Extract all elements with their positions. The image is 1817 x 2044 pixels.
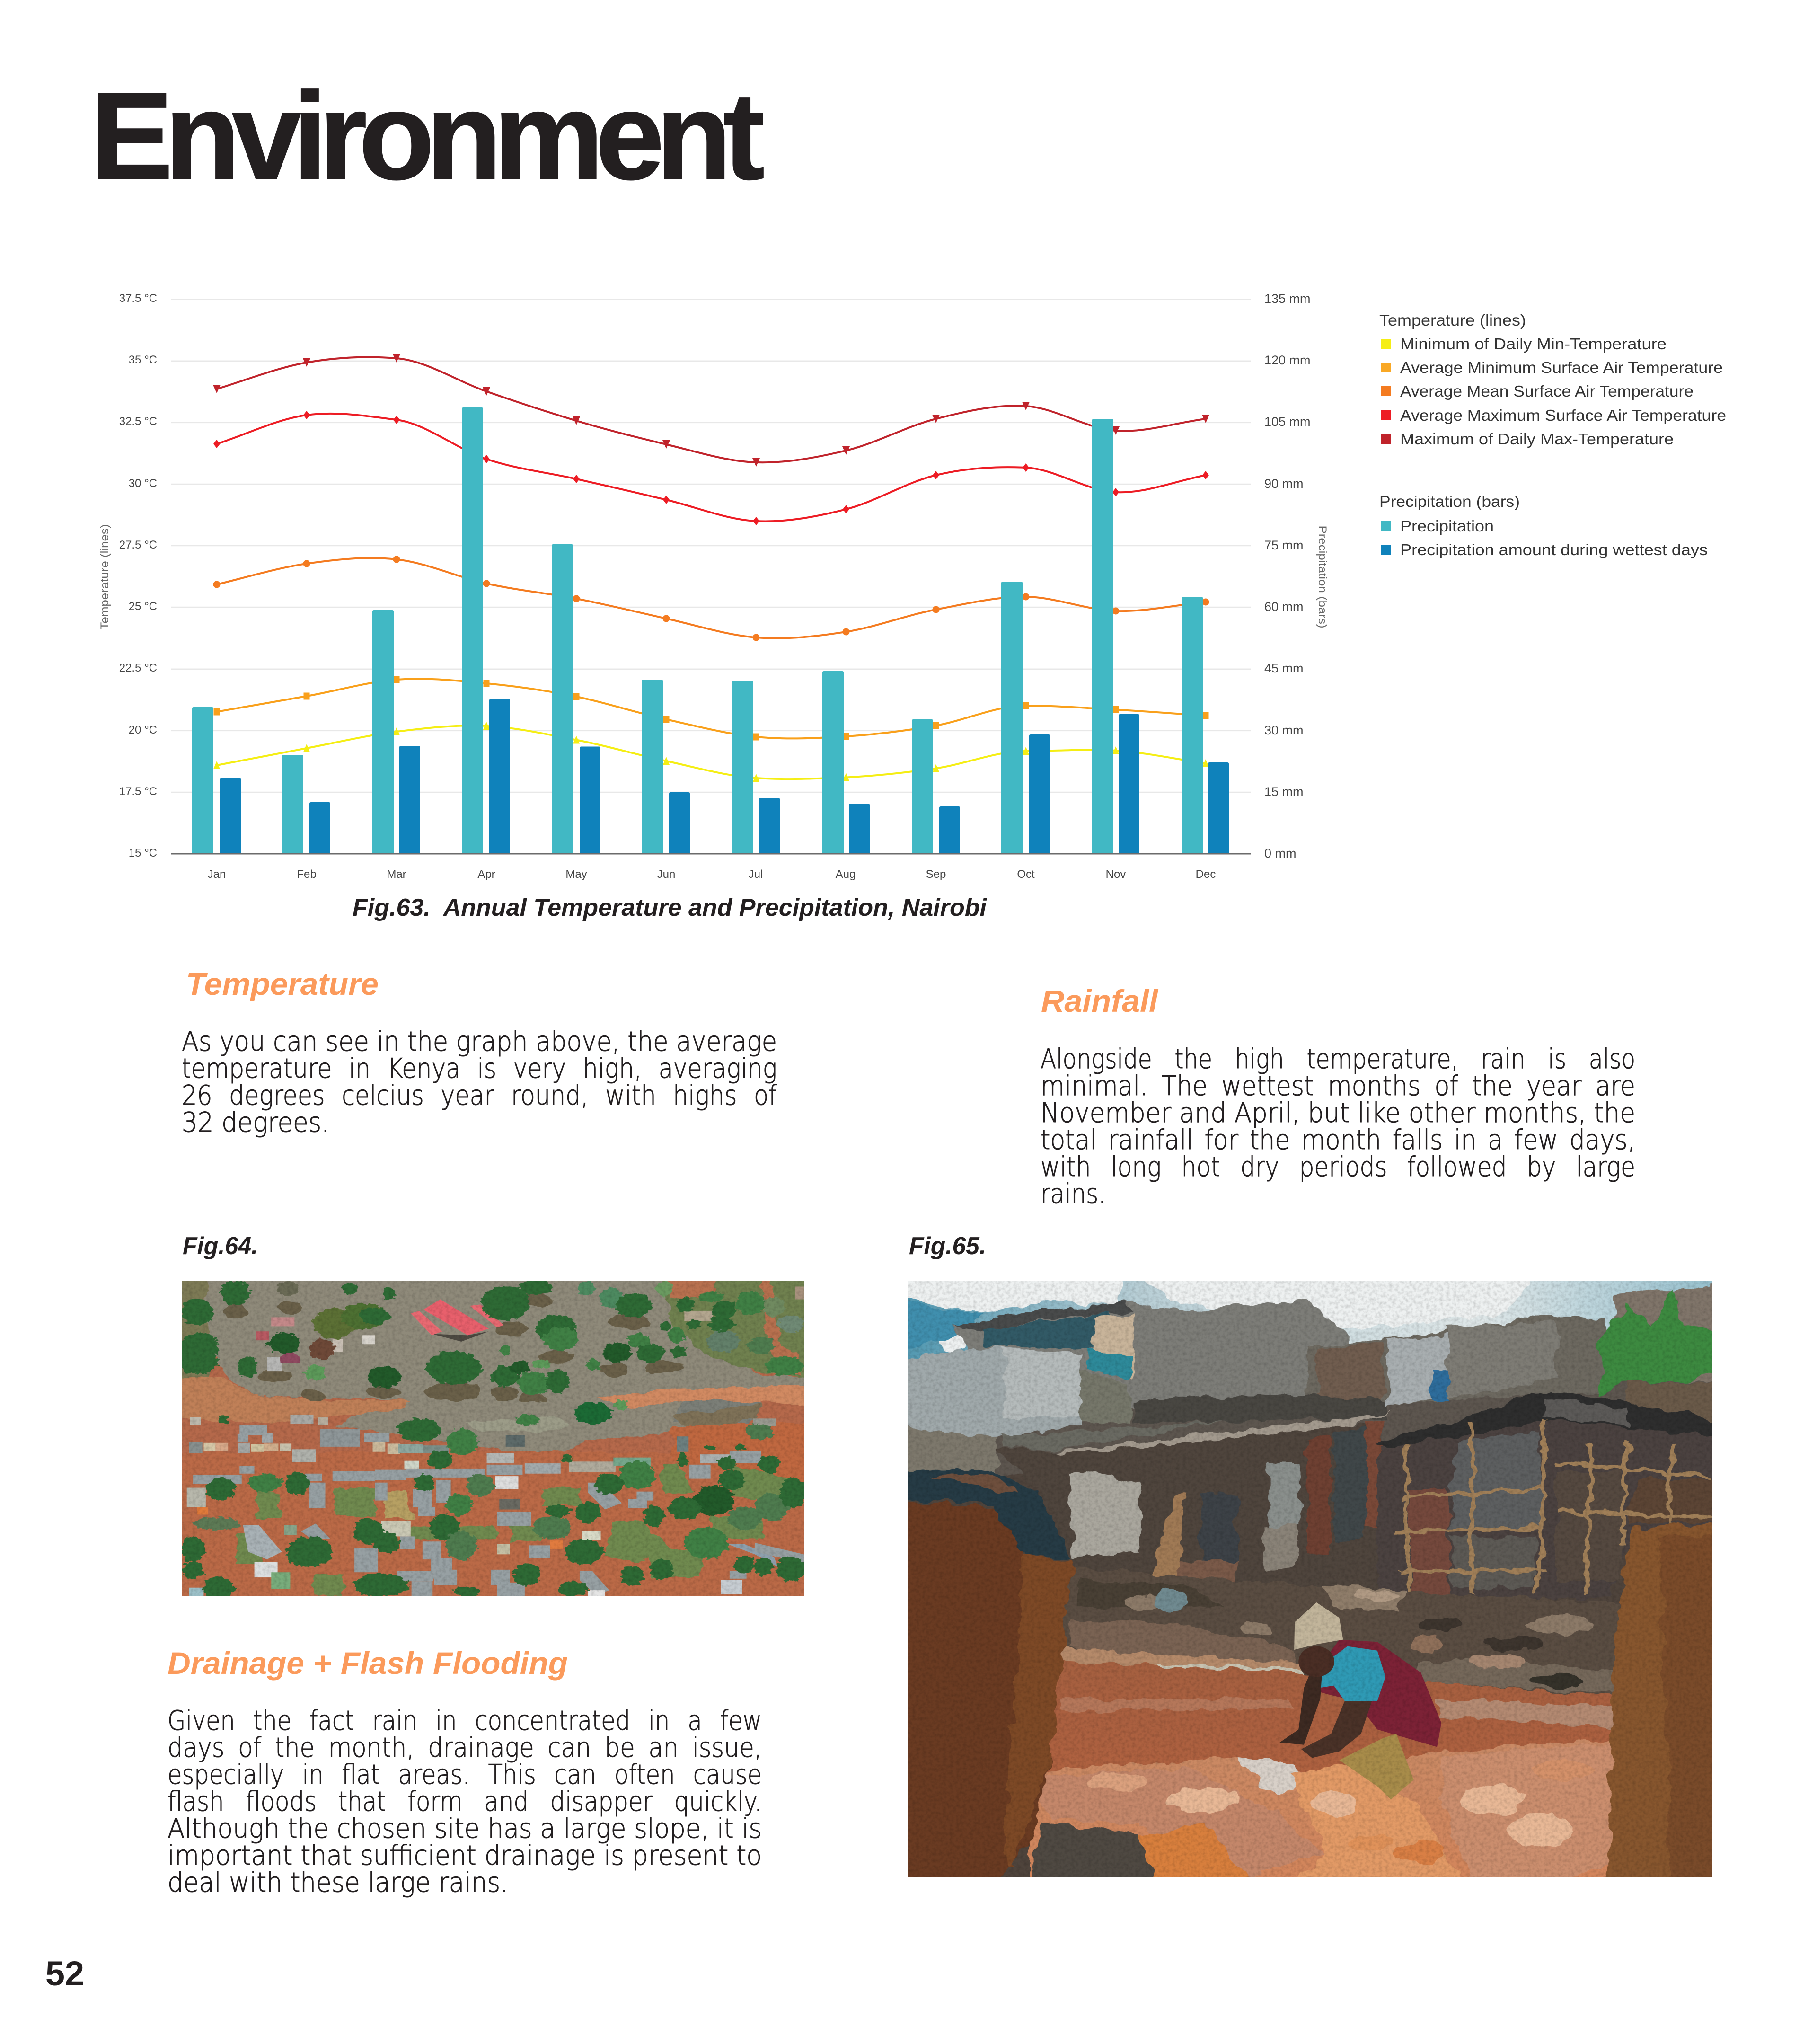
left axis labels: 15 °C [129, 847, 157, 859]
left axis labels: 22.5 °C [119, 662, 157, 674]
text block: temperature: temperature in Kenya is very high, averaging [182, 1053, 777, 1084]
month labels: Sep [926, 868, 946, 881]
text block: rainfall: rains. [1041, 1178, 1106, 1210]
month labels: Nov [1106, 868, 1126, 881]
mid shacks [1133, 1395, 1388, 1423]
text block: rainfall: Alongside the high temperature, rain is also [1041, 1044, 1635, 1075]
legend item: precipitation: Precipitation [1400, 517, 1494, 535]
text block: temperature: 32 degrees. [182, 1107, 329, 1138]
left axis labels: 20 °C [129, 724, 157, 736]
bars: precipitation amount during wettest days [220, 699, 1229, 854]
month labels: Jun [657, 868, 675, 881]
figure label: Fig.65: Fig.65. [909, 1232, 986, 1260]
text block: drainage and flash flooding [168, 1705, 762, 1898]
left axis labels: 17.5 °C [119, 785, 157, 798]
water [1041, 1662, 1627, 1782]
combo chart: annual temperature and precipitation [98, 292, 1329, 881]
legend item: maximum of daily max: Maximum of Daily Max-Temperature [1400, 430, 1674, 448]
month labels: Oct [1017, 868, 1035, 881]
heading: rainfall: Rainfall [1041, 983, 1159, 1018]
title: Environment [90, 67, 765, 205]
left axis labels [119, 292, 157, 859]
right axis labels: 75 mm [1264, 538, 1304, 552]
left axis labels: 35 °C [129, 354, 157, 366]
right axis labels: 105 mm [1264, 415, 1311, 429]
text block: temperature: 26 degrees celcius year round, with highs of [182, 1080, 777, 1111]
red tin roofs [432, 1331, 489, 1342]
legend [1379, 311, 1726, 558]
legend item: average mean: Average Mean Surface Air Temperature [1400, 382, 1694, 400]
text block: rainfall [1041, 1044, 1635, 1210]
left axis labels: 27.5 °C [119, 539, 157, 551]
right axis labels: 15 mm [1264, 785, 1304, 799]
right axis labels: 60 mm [1264, 600, 1304, 614]
text block: drainage and flash flooding: important that sufficient drainage is present to [168, 1840, 762, 1871]
y axis title: temperature: Temperature (lines) [98, 524, 111, 629]
sky [908, 1281, 1712, 1359]
y axis title: precipitation: Precipitation (bars) [1316, 526, 1329, 628]
text block: rainfall: total rainfall for the month falls in a few days, [1041, 1124, 1635, 1156]
left axis labels: 37.5 °C [119, 292, 157, 305]
figure label: Fig.64: Fig.64. [183, 1232, 258, 1260]
right axis labels: 90 mm [1264, 477, 1304, 491]
month labels: Aug [836, 868, 856, 881]
heading: temperature: Temperature [186, 966, 379, 1001]
right axis labels: 30 mm [1264, 723, 1304, 737]
chart caption: Fig.63. Annual Temperature and Precipitation, Nairobi [353, 894, 988, 921]
legend item: average maximum: Average Maximum Surface Air Temperature [1400, 407, 1726, 424]
legend heading: precipitation: Precipitation (bars) [1379, 493, 1520, 510]
month labels: Apr [477, 868, 495, 881]
right shack [1377, 1418, 1736, 1598]
rubbish bank [1057, 1567, 1627, 1701]
left axis labels: 25 °C [129, 600, 157, 613]
right wooden post [1608, 1523, 1736, 1887]
grid lines [171, 299, 1251, 792]
month labels: Mar [387, 868, 406, 881]
page number: 52 [45, 1955, 84, 1993]
heading: drainage and flash flooding: Drainage + Flash Flooding [168, 1646, 568, 1681]
month labels: May [565, 868, 587, 881]
left axis labels: 32.5 °C [119, 415, 157, 428]
line: average mean surface air temperature [213, 556, 1209, 641]
month labels: Jan [208, 868, 226, 881]
line: maximum of daily max temperature [213, 354, 1209, 467]
line: average maximum surface air temperature [213, 411, 1209, 525]
text block: drainage and flash flooding: days of the month, drainage can be an issue, [168, 1732, 762, 1763]
text block: rainfall: with long hot dry periods followed by large [1041, 1151, 1635, 1183]
text block: temperature [182, 1026, 777, 1138]
text block: drainage and flash flooding: deal with these large rains. [168, 1867, 508, 1898]
photo: aerial view of flooded village [182, 1281, 804, 1596]
x axis baseline [171, 853, 1251, 855]
banana plant [1596, 1290, 1712, 1397]
legend item: average minimum: Average Minimum Surface Air Temperature [1400, 359, 1723, 376]
text block: drainage and flash flooding: especially in flat areas. This can often cause [168, 1759, 762, 1790]
left axis labels: 30 °C [129, 477, 157, 490]
month labels: Feb [297, 868, 317, 881]
back buildings [953, 1300, 1348, 1410]
right axis labels: 135 mm [1264, 292, 1311, 306]
text block: rainfall: minimal. The wettest months of the year are [1041, 1071, 1635, 1102]
right axis labels: 0 mm [1264, 846, 1297, 860]
line: minimum of daily min temperature [213, 722, 1209, 782]
text block: temperature: As you can see in the graph above, the average [182, 1026, 777, 1057]
right axis labels: 45 mm [1264, 661, 1304, 675]
right axis labels: 120 mm [1264, 353, 1311, 367]
left wooden post [889, 1500, 1073, 1887]
legend item: minimum of daily min: Minimum of Daily Min-Temperature [1400, 335, 1667, 353]
bars: precipitation [192, 407, 1203, 854]
month labels: Jul [749, 868, 763, 881]
month labels [208, 868, 1216, 881]
line: average minimum surface air temperature [214, 676, 1208, 740]
text block: drainage and flash flooding: flash floods that form and disapper quickly. [168, 1786, 762, 1817]
text block: drainage and flash flooding: Given the fact rain in concentrated in a few [168, 1705, 762, 1736]
month labels: Dec [1196, 868, 1216, 881]
text block: rainfall: November and April, but like other months, the [1041, 1097, 1635, 1129]
man [1304, 1640, 1441, 1747]
legend heading: temperature: Temperature (lines) [1379, 311, 1526, 329]
text block: drainage and flash flooding: Although the chosen site has a large slope, it is [168, 1813, 762, 1844]
photo: man in flood water among shacks [889, 1270, 1736, 1887]
legend item: wettest days: Precipitation amount during wettest days [1400, 541, 1708, 558]
right axis labels [1264, 292, 1311, 860]
